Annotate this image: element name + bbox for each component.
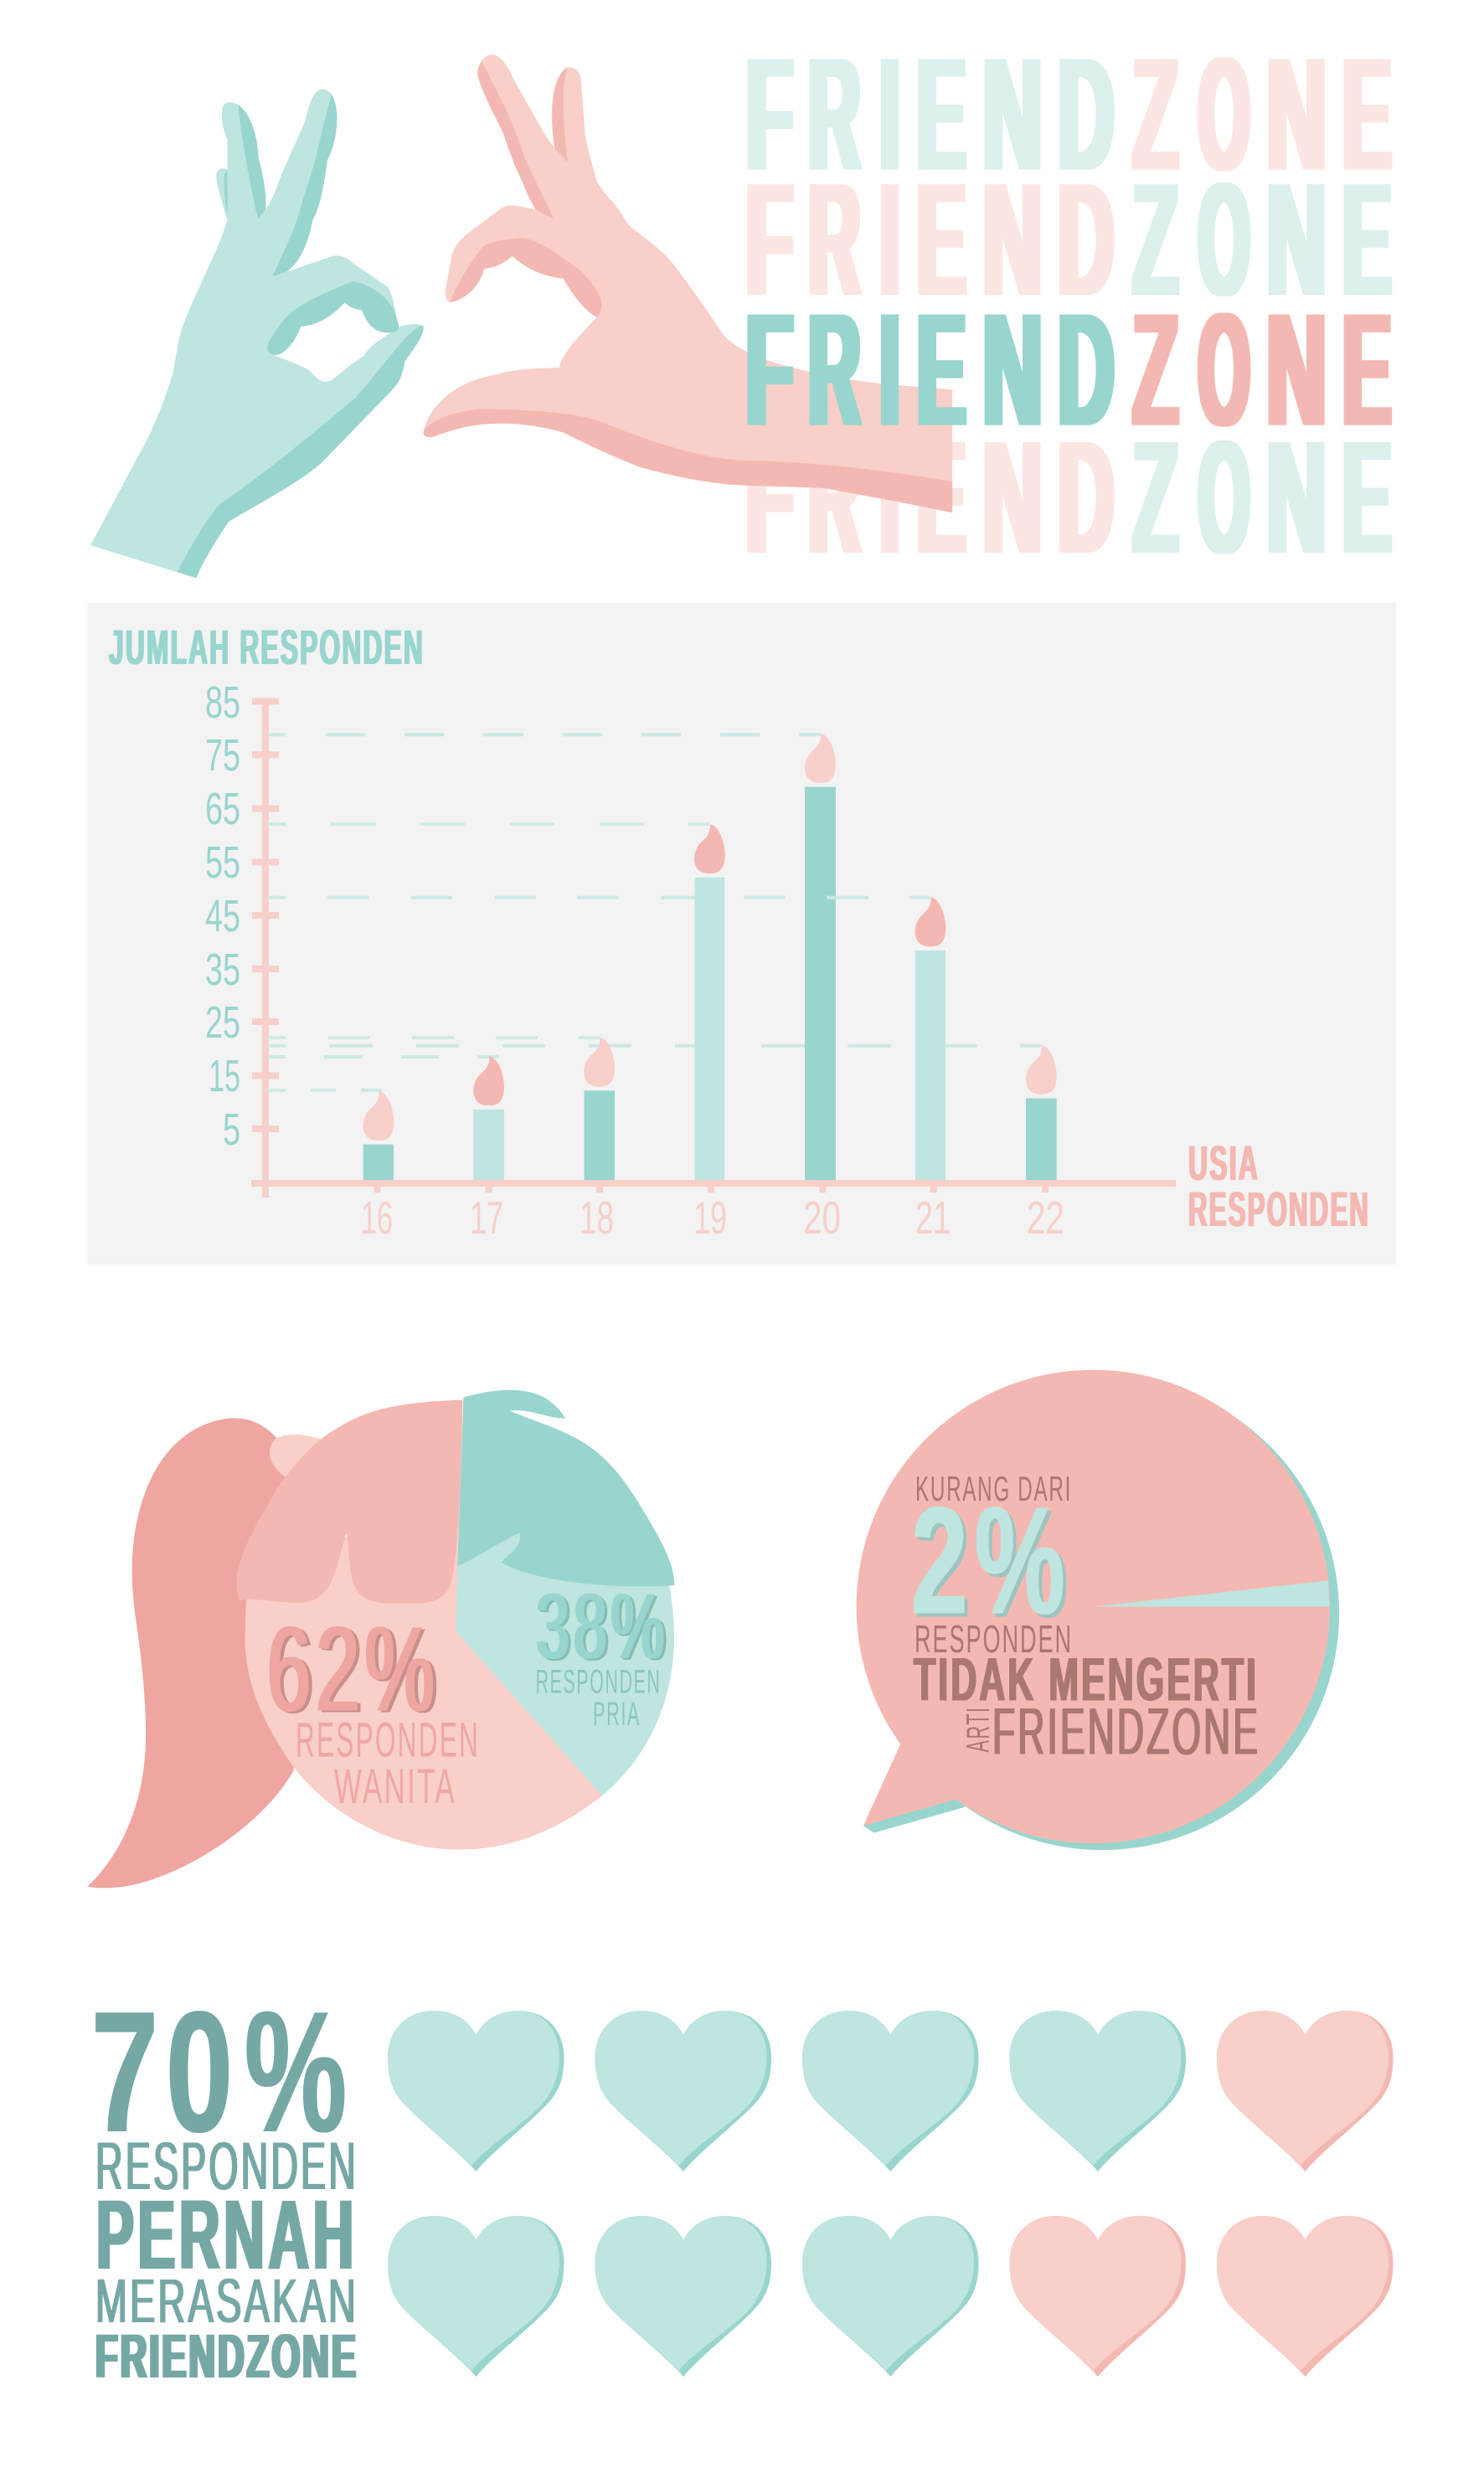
title row 1: E (1342, 24, 1391, 204)
title row 3 highlighted: E (1342, 280, 1391, 460)
x axis labels: 19 (693, 1192, 727, 1244)
bubble body (857, 1370, 1330, 1843)
y axis labels: 65 (205, 784, 240, 834)
title row 2: F (746, 150, 793, 329)
title row 2: R (809, 149, 860, 329)
icon: teal hand (90, 90, 424, 578)
text: tidak mengerti: TIDAK MENGERTI (914, 1646, 1259, 1713)
x axis labels (361, 1192, 1064, 1244)
x axis labels: 22 (1027, 1192, 1064, 1244)
icon: heart pink (1217, 2011, 1394, 2172)
title row 3 highlighted (746, 279, 1391, 460)
title row 1: E (917, 24, 966, 204)
title row 4: E (917, 407, 966, 587)
70 percent number: % (245, 1976, 347, 2168)
responden line: RESPONDEN (95, 2129, 358, 2204)
x axis labels: 20 (803, 1192, 841, 1244)
label: respondents male: RESPONDEN (536, 1664, 662, 1701)
icon: heart teal (595, 2216, 771, 2377)
title row 2: Z (1133, 149, 1177, 329)
title row 4: O (1198, 408, 1250, 588)
y axis labels: 45 (205, 891, 240, 941)
title row 2 (746, 149, 1391, 330)
speech bubble: 2 percent (857, 1370, 1339, 1850)
icon: candle flames on bars (363, 734, 1057, 1141)
title row 2: E (1342, 149, 1391, 329)
title row 4: N (1266, 409, 1327, 588)
merasakan line: MERASAKAN (95, 2266, 358, 2336)
icon: heart pink (1010, 2216, 1186, 2377)
title row 2: N (983, 151, 1043, 330)
title row 4: N (983, 409, 1043, 588)
icon: pink hand (424, 54, 952, 513)
label: respondents female (296, 1713, 480, 1814)
friendzone line: FRIENDZONE (95, 2321, 358, 2391)
icon: short teal hair (457, 1390, 674, 1586)
y axis labels: 55 (205, 837, 240, 888)
title row 4: Z (1133, 407, 1177, 587)
title row 4: E (1342, 407, 1391, 587)
y axis labels (205, 677, 240, 1155)
bubble shadow circle (866, 1377, 1339, 1850)
label: respondents female: WANITA (334, 1759, 456, 1814)
y axis labels: 35 (205, 945, 240, 995)
title row 1: I (880, 25, 899, 204)
y axis labels: 75 (205, 730, 240, 781)
70 percent number (91, 1976, 347, 2168)
label: 38 percent: 38% (538, 1577, 671, 1680)
pictogram: hearts 70 percent (388, 2011, 1394, 2377)
label: respondents male (536, 1664, 662, 1733)
title row 3 highlighted: R (809, 279, 860, 460)
x axis labels: 21 (915, 1192, 951, 1244)
title row 2: E (917, 149, 966, 329)
title row 4 (746, 407, 1391, 588)
title row 2: D (1059, 150, 1114, 329)
icon: fringe hair (236, 1400, 462, 1604)
label: respondents male: PRIA (593, 1696, 641, 1733)
text: 2 percent (911, 1474, 1075, 1650)
y axis labels: 5 (223, 1105, 240, 1155)
70 percent number: 0 (166, 1976, 233, 2168)
title row 1: D (1059, 24, 1114, 204)
pie chart: gender as girl head (87, 1390, 674, 1888)
title row 1: N (1266, 25, 1327, 204)
text: 2 percent: 2% (915, 1477, 1075, 1650)
text: kurang dari: KURANG DARI (915, 1469, 1072, 1508)
title row 1: O (1198, 25, 1250, 204)
text: 2 percent: 2% (911, 1474, 1072, 1646)
title row 2: O (1198, 150, 1250, 330)
bars (363, 787, 1057, 1180)
x axis labels: 18 (580, 1192, 614, 1244)
pie slice: female (245, 1473, 602, 1850)
label: 38 percent: 38% (536, 1575, 668, 1678)
x axis title: USIA (1188, 1136, 1260, 1191)
icon: hair tie (270, 1435, 322, 1477)
title row 4: F (746, 408, 793, 587)
title row 3 highlighted: F (746, 280, 793, 459)
icon: heart teal (388, 2216, 564, 2377)
title row 3 highlighted: Z (1133, 280, 1177, 460)
title row 2: I (880, 151, 899, 329)
icon: heart teal (802, 2011, 978, 2172)
icon: heart teal (802, 2216, 978, 2377)
title row 4: I (880, 409, 899, 587)
title row 1 (746, 23, 1391, 204)
title row 2: N (1266, 151, 1327, 330)
text: responden: RESPONDEN (915, 1617, 1073, 1661)
title row 3 highlighted: N (1266, 281, 1327, 460)
y axis labels: 85 (205, 677, 240, 728)
x axis with ticks (251, 1180, 1176, 1193)
label: 62 percent: 62% (271, 1603, 443, 1739)
x axis labels: 17 (470, 1192, 503, 1244)
title row 3 highlighted: D (1059, 280, 1114, 459)
70 percent number: 7 (91, 1976, 158, 2168)
text block: 70 percent statement (91, 1976, 358, 2391)
icon: heart teal (388, 2011, 564, 2172)
x axis title (1188, 1136, 1370, 1237)
label: respondents female: RESPONDEN (296, 1713, 480, 1767)
y axis labels: 15 (209, 1051, 240, 1101)
label: 62 percent (267, 1601, 443, 1739)
title row 1: Z (1133, 24, 1177, 204)
icon: heart teal (1010, 2011, 1186, 2172)
icon: ponytail (87, 1418, 312, 1888)
title row 4: D (1059, 408, 1114, 587)
y axis labels: 25 (205, 997, 240, 1048)
title row 3 highlighted: O (1198, 281, 1250, 460)
label: 38 percent (536, 1575, 671, 1680)
pie slice: male (456, 1506, 674, 1796)
title row 1: N (983, 25, 1043, 204)
title row 4: R (809, 407, 860, 587)
title row 3 highlighted: I (880, 281, 899, 460)
label: 62 percent: 62% (267, 1601, 440, 1737)
title row 3 highlighted: N (983, 281, 1043, 460)
panel: bar chart of respondents by age (87, 603, 1396, 1265)
title row 1: F (746, 24, 793, 204)
icon: heart pink (1217, 2216, 1394, 2377)
icon: heart teal (595, 2011, 771, 2172)
x axis labels: 16 (361, 1192, 393, 1244)
title row 1: R (809, 23, 860, 204)
text: arti rotated: ARTI (961, 1707, 997, 1752)
title row 3 highlighted: E (917, 280, 966, 460)
chart heading: JUMLAH RESPONDEN (109, 621, 425, 675)
text: friendzone: FRIENDZONE (992, 1693, 1260, 1769)
pie wedge 2 percent (1094, 1580, 1330, 1607)
bubble shadow tail (863, 1787, 965, 1833)
y axis with ticks (252, 698, 279, 1198)
pernah line: PERNAH (96, 2180, 358, 2290)
